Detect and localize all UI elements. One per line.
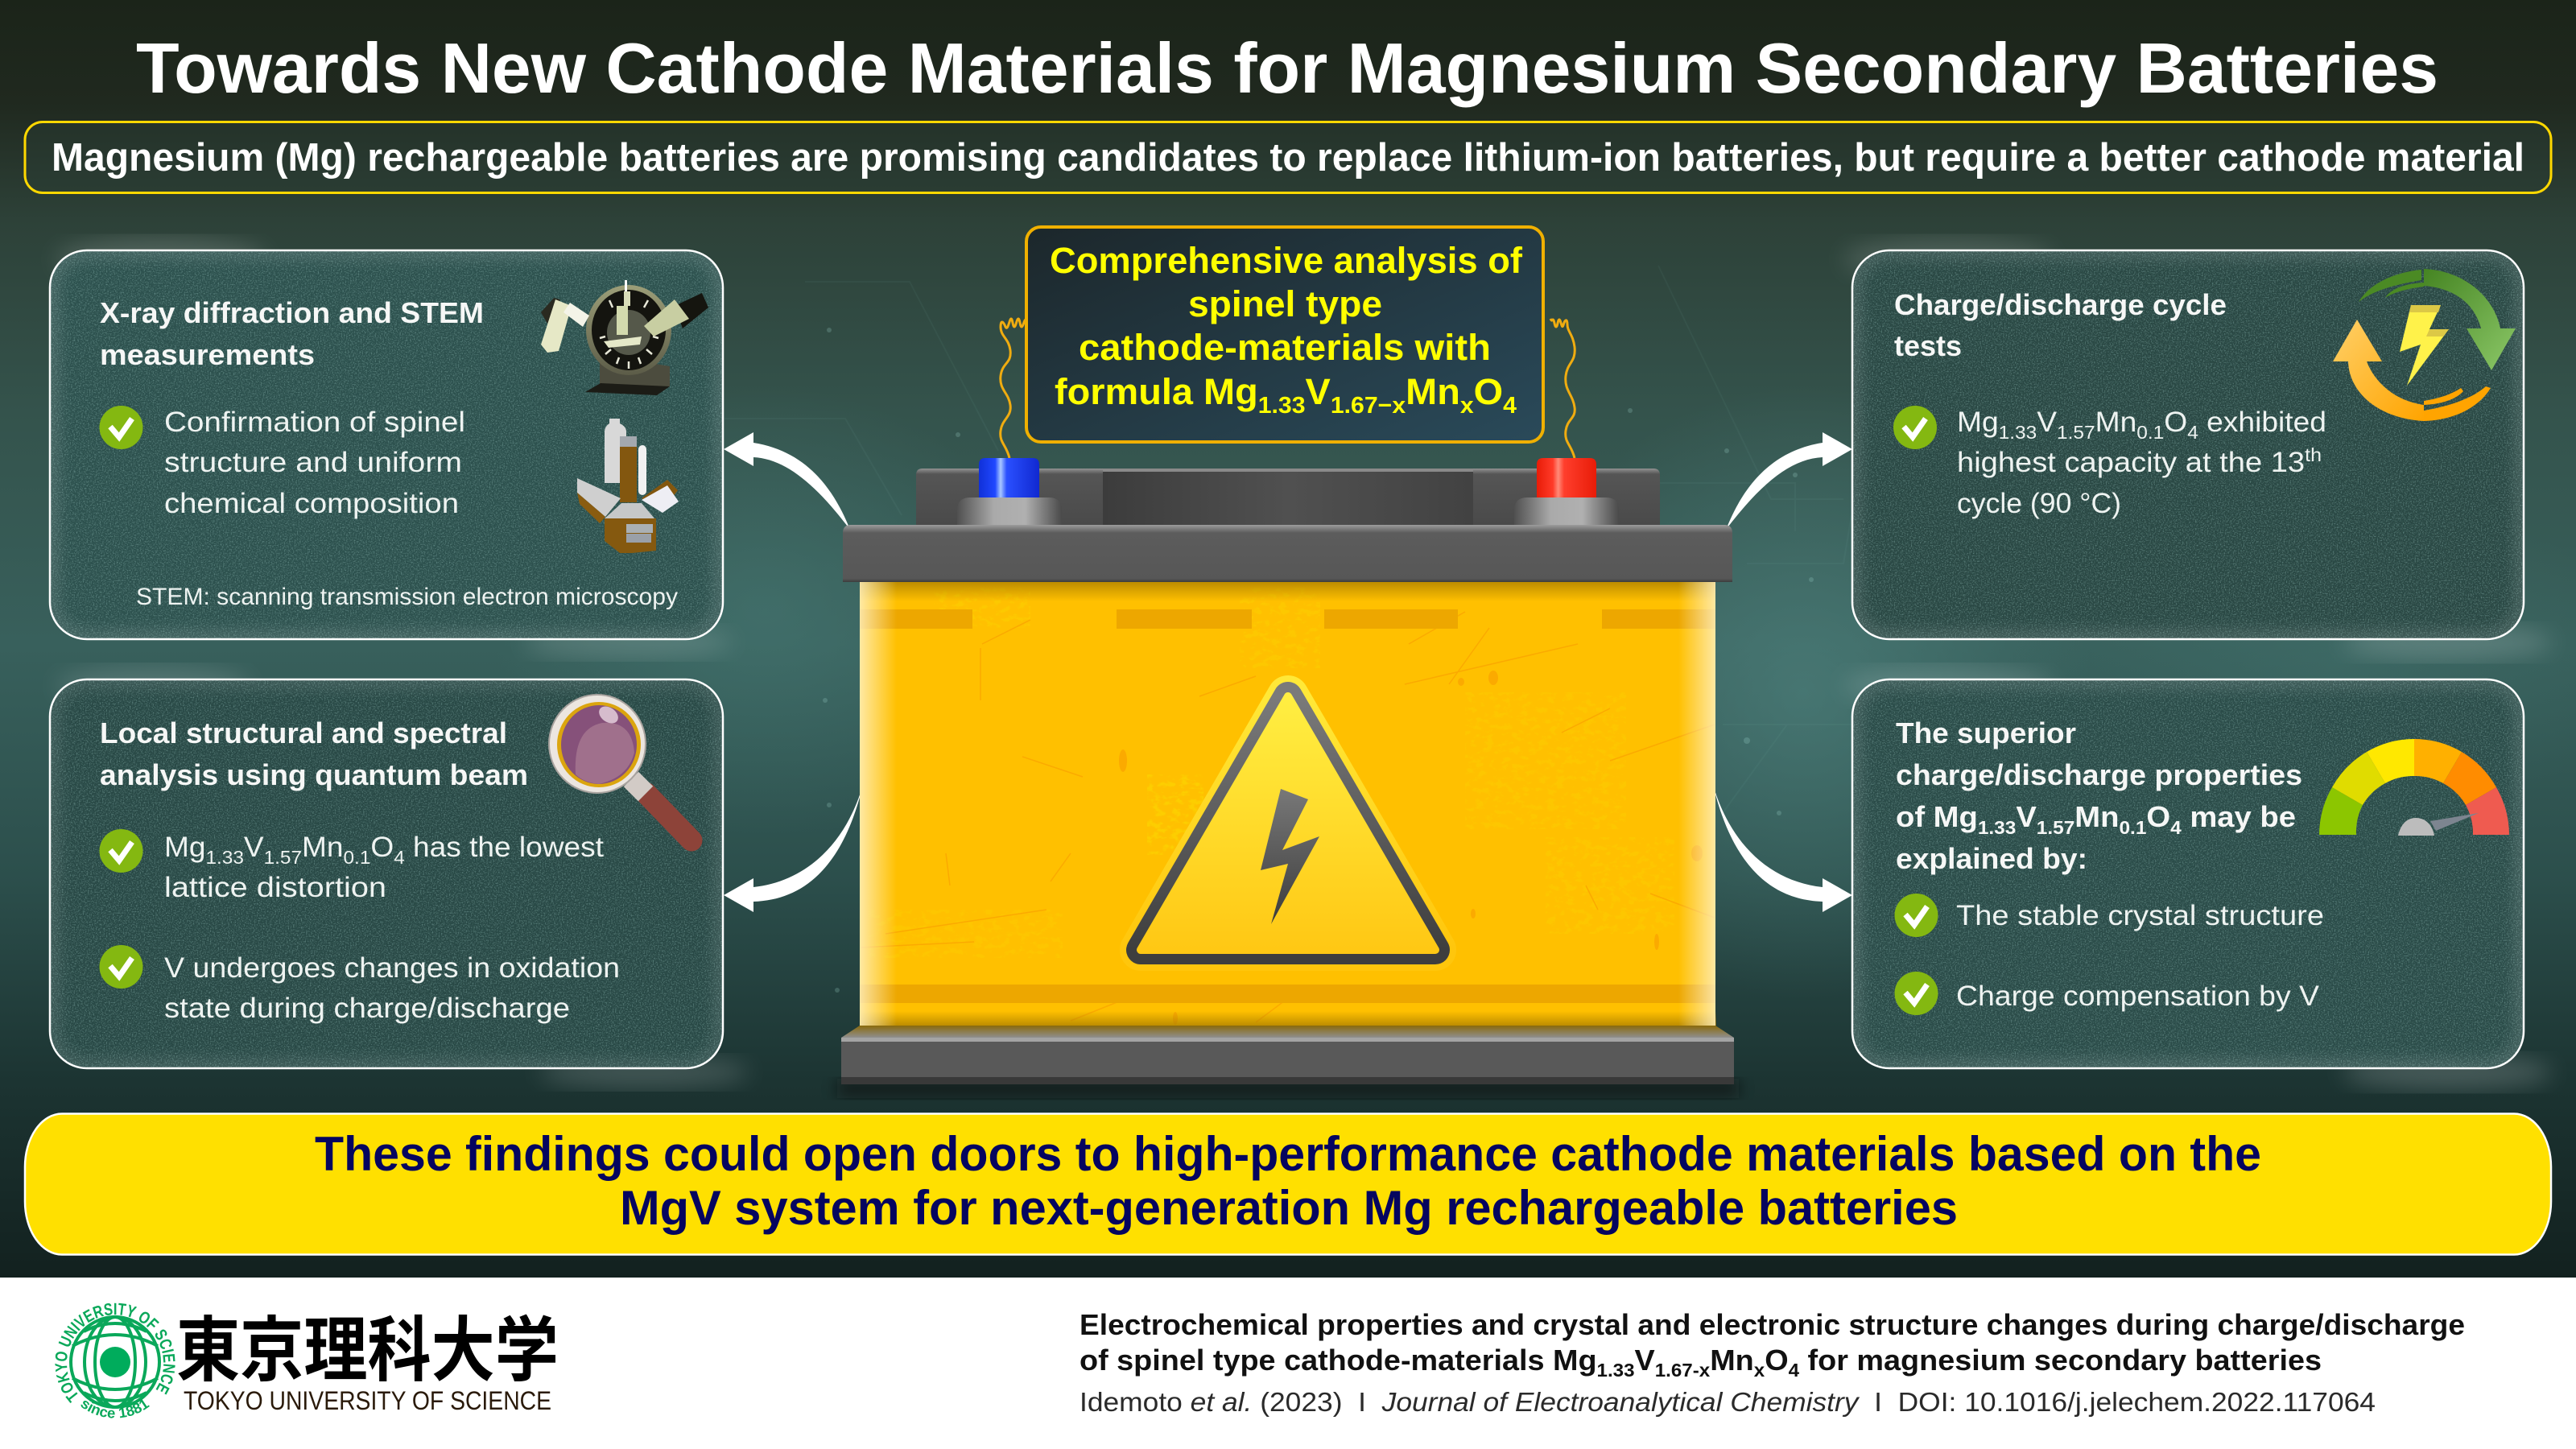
callout: comprehensive analysis bbox=[1026, 227, 1543, 442]
subtitle banner bbox=[25, 122, 2551, 193]
citation: for magnesium secondary batteries bbox=[1799, 1344, 2322, 1377]
icon: check bbox=[100, 829, 143, 873]
heading: 0.1 bbox=[2119, 817, 2147, 838]
heading: 1.57 bbox=[2037, 817, 2074, 838]
heading bbox=[1894, 288, 2227, 362]
text block: lowest lattice distortion: Mn bbox=[302, 832, 344, 863]
text: charge compensation: Charge compensation by V bbox=[1956, 980, 2320, 1012]
battery bbox=[837, 458, 1739, 1098]
text block: highest capacity: th bbox=[2305, 444, 2322, 465]
citation bbox=[1080, 1308, 2465, 1417]
text block: lowest lattice distortion: 0.1 bbox=[344, 847, 370, 868]
heading: The superior bbox=[1896, 716, 2076, 749]
logo: university name: TOKYO UNIVERSITY OF SCIENCE bbox=[184, 1386, 551, 1415]
arrow: battery to top-left panel bbox=[724, 432, 850, 530]
heading: analysis using quantum beam bbox=[100, 758, 528, 791]
icon: charge cycle arrows bbox=[2333, 269, 2516, 421]
text block: highest capacity: Mg bbox=[1957, 407, 1996, 438]
text block: lowest lattice distortion: 1.57 bbox=[264, 847, 302, 868]
text block: highest capacity: cycle (90 °C) bbox=[1957, 488, 2121, 519]
arrow: battery to bottom-left panel bbox=[724, 785, 863, 912]
callout: comprehensive analysis: O bbox=[1474, 371, 1503, 412]
callout: comprehensive analysis: cathode-materials with bbox=[1079, 327, 1491, 368]
text block: V oxidation state bbox=[164, 952, 620, 1024]
text block: V oxidation state: V undergoes changes in oxidation bbox=[164, 952, 620, 984]
text block: lowest lattice distortion: lattice distortion bbox=[164, 872, 386, 903]
citation: Idemoto et al. (2023) I Journal of Electroanalytical Chemistry I DOI: 10.1016/j.jelechem.2022.117064 bbox=[1080, 1387, 2376, 1417]
icon: check bbox=[1895, 894, 1938, 937]
citation: Electrochemical properties and crystal and electronic structure changes during charge/discharge bbox=[1080, 1308, 2465, 1341]
panel: X-ray diffraction and STEM bbox=[50, 238, 733, 658]
callout: comprehensive analysis: Mn bbox=[1406, 371, 1460, 412]
arrow: battery to top-right panel bbox=[1726, 432, 1852, 530]
footer band bbox=[0, 1278, 2576, 1449]
battery body bbox=[860, 582, 1716, 1026]
subtitle banner: Magnesium (Mg) rechargeable batteries are promising candidates to replace lithium-ion batteries, but require a better cathode material bbox=[52, 136, 2524, 180]
icon: electron microscope bbox=[577, 419, 679, 553]
text block: highest capacity: 1.33 bbox=[1999, 422, 2037, 443]
citation: V bbox=[1635, 1344, 1655, 1377]
icon: magnifying glass bbox=[549, 695, 691, 840]
text block: highest capacity: highest capacity at the 13 bbox=[1957, 447, 2277, 478]
text block: highest capacity: 4 bbox=[2187, 422, 2198, 443]
logo: Tokyo University of Science seal: TOKYO UNIVERSITY OF SCIENCE bbox=[55, 1302, 175, 1403]
panel: local structural and spectral analysis bbox=[50, 667, 749, 1088]
text block: highest capacity: exhibited bbox=[2198, 407, 2326, 438]
text block: lowest lattice distortion: Mg bbox=[164, 832, 204, 863]
heading: X-ray diffraction and STEM bbox=[100, 296, 484, 329]
title: Towards New Cathode Materials for Magnesium Secondary Batteries bbox=[136, 28, 2438, 108]
text block: highest capacity: 0.1 bbox=[2136, 422, 2164, 443]
citation: 1.67-x bbox=[1655, 1360, 1710, 1381]
text block: lowest lattice distortion: O bbox=[370, 832, 394, 863]
text block: confirmation: structure and uniform bbox=[164, 447, 462, 478]
citation: Mn bbox=[1710, 1344, 1754, 1377]
battery terminal block bbox=[916, 469, 1660, 525]
text block: highest capacity: V bbox=[2037, 407, 2058, 438]
text block: V oxidation state: state during charge/discharge bbox=[164, 993, 570, 1024]
callout: comprehensive analysis: 4 bbox=[1503, 393, 1517, 419]
logo: Tokyo University of Science seal: since 1881 bbox=[80, 1399, 150, 1418]
icon: check bbox=[100, 945, 143, 989]
conclusion banner bbox=[25, 1114, 2551, 1254]
text block: highest capacity: Mn bbox=[2095, 407, 2136, 438]
text block: lowest lattice distortion bbox=[164, 832, 604, 903]
text block: highest capacity: 1.57 bbox=[2057, 422, 2095, 443]
icon: gauge bbox=[2319, 739, 2509, 836]
callout: comprehensive analysis: x bbox=[1460, 393, 1474, 419]
logo: university name: 東京理科大学 bbox=[176, 1294, 559, 1396]
icon: high-voltage warning triangle bbox=[1141, 696, 1435, 950]
text block: highest capacity bbox=[1957, 407, 2326, 519]
icon: X-ray diffractometer bbox=[541, 280, 708, 395]
heading bbox=[100, 296, 484, 371]
terminal: positive red bbox=[1514, 458, 1619, 525]
callout: comprehensive analysis: formula Mg bbox=[1055, 371, 1249, 412]
heading: measurements bbox=[100, 338, 315, 371]
icon: check bbox=[1895, 972, 1938, 1015]
citation: O bbox=[1765, 1344, 1789, 1377]
conclusion banner: MgV system for next-generation Mg rechargeable batteries bbox=[620, 1181, 1958, 1235]
text block: confirmation: chemical composition bbox=[164, 488, 459, 519]
citation: of spinel type cathode-materials Mg bbox=[1080, 1344, 1572, 1377]
citation: 1.33 bbox=[1597, 1360, 1635, 1381]
panel: charge/discharge cycle tests bbox=[1843, 238, 2552, 660]
text block: lowest lattice distortion: has the lowest bbox=[405, 832, 604, 863]
callout: comprehensive analysis: V bbox=[1306, 371, 1331, 412]
citation: 4 bbox=[1789, 1360, 1799, 1381]
heading: 4 bbox=[2170, 817, 2182, 838]
heading: explained by: bbox=[1896, 842, 2087, 875]
heading: Mn bbox=[2074, 800, 2119, 833]
wire: right bbox=[1550, 319, 1575, 458]
citation: x bbox=[1754, 1360, 1765, 1381]
callout: comprehensive analysis: 1.33 bbox=[1258, 393, 1306, 419]
heading: of Mg bbox=[1896, 800, 1973, 833]
text block: lowest lattice distortion: V bbox=[244, 832, 264, 863]
text block: lowest lattice distortion: 4 bbox=[394, 847, 405, 868]
text block: confirmation bbox=[164, 407, 465, 519]
wire: left bbox=[1001, 319, 1026, 458]
callout: comprehensive analysis: spinel type bbox=[1188, 283, 1382, 324]
panel: superior charge/discharge properties bbox=[1843, 667, 2552, 1090]
text: stable crystal structure: The stable crystal structure bbox=[1956, 900, 2324, 931]
heading bbox=[100, 716, 528, 791]
conclusion banner: These findings could open doors to high-performance cathode materials based on the bbox=[315, 1127, 2261, 1181]
heading: O bbox=[2146, 800, 2170, 833]
battery lid bbox=[843, 525, 1732, 582]
callout: comprehensive analysis: 1.67−x bbox=[1331, 393, 1406, 419]
text block: highest capacity: O bbox=[2164, 407, 2187, 438]
heading: 1.33 bbox=[1978, 817, 2016, 838]
strip segments bbox=[860, 609, 1715, 1003]
footnote: STEM: STEM: scanning transmission electron microscopy bbox=[136, 584, 678, 610]
text block: lowest lattice distortion: 1.33 bbox=[205, 847, 244, 868]
arrow: battery to bottom-right panel bbox=[1713, 785, 1852, 912]
icon: check bbox=[100, 406, 143, 449]
text block: confirmation: Confirmation of spinel bbox=[164, 407, 465, 438]
heading: tests bbox=[1894, 329, 1962, 362]
icon: check bbox=[1893, 406, 1937, 449]
callout: comprehensive analysis: Comprehensive analysis of bbox=[1050, 240, 1523, 281]
heading bbox=[1896, 716, 2302, 875]
heading: V bbox=[2016, 800, 2037, 833]
heading: Charge/discharge cycle bbox=[1894, 288, 2227, 321]
heading: may be bbox=[2182, 800, 2296, 833]
battery foot bbox=[841, 1026, 1734, 1084]
heading: Local structural and spectral bbox=[100, 716, 507, 749]
terminal: negative blue bbox=[957, 458, 1062, 525]
heading: charge/discharge properties bbox=[1896, 758, 2302, 791]
